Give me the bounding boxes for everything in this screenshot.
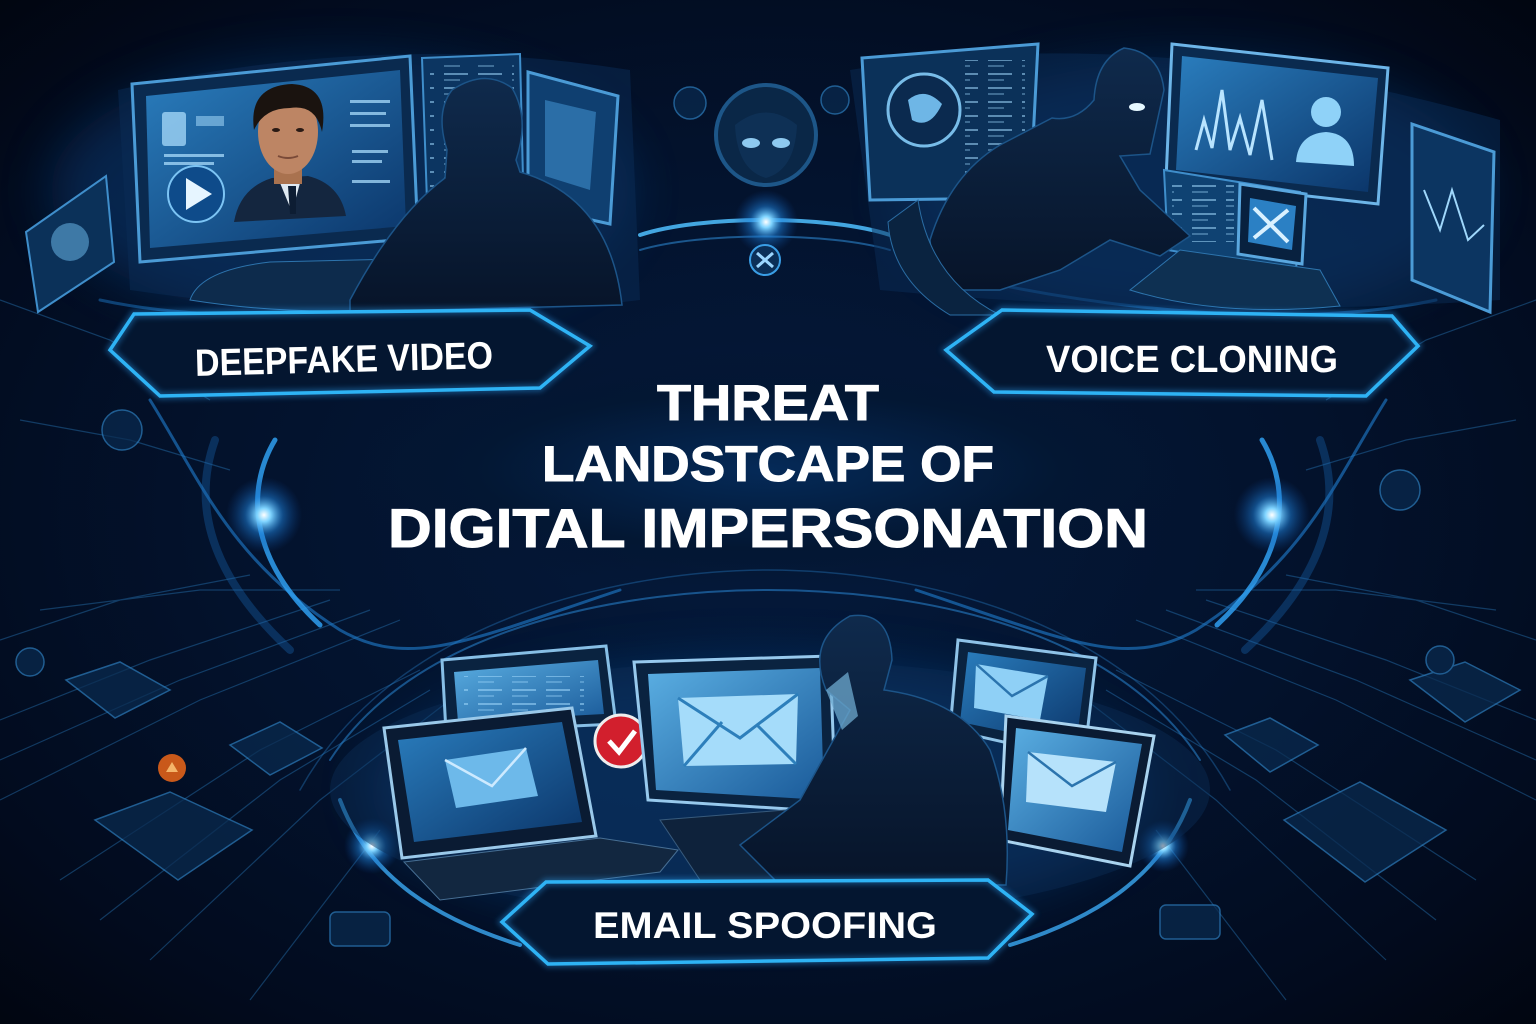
hacker silhouette bbox=[930, 48, 1190, 290]
keyboard desk bbox=[190, 258, 460, 311]
face mask glow bbox=[826, 672, 858, 730]
circuit lines lower left and right bbox=[0, 300, 1536, 1000]
label: email spoofing: EMAIL SPOOFING bbox=[593, 905, 937, 946]
envelope bbox=[445, 748, 538, 808]
portrait of man bbox=[234, 84, 346, 222]
title bbox=[388, 375, 1148, 559]
screen widgets bbox=[162, 100, 390, 183]
panel: email spoofing scene bbox=[330, 615, 1210, 920]
side arcs framing the title bbox=[100, 220, 1436, 945]
panel: voice cloning scene bbox=[850, 44, 1500, 315]
label: email spoofing bbox=[502, 880, 1032, 964]
label: deepfake video: DEEPFAKE VIDEO bbox=[195, 335, 493, 385]
far right screen bbox=[1412, 124, 1494, 312]
orange alert badge bbox=[158, 754, 186, 782]
centre monitor bbox=[634, 656, 836, 812]
mid screen bbox=[1164, 170, 1300, 272]
hacker silhouette bbox=[740, 615, 1007, 885]
label: deepfake video bbox=[110, 310, 590, 396]
right tilted screen bbox=[528, 72, 618, 224]
title: THREAT bbox=[657, 375, 879, 431]
front left laptop bbox=[384, 708, 678, 900]
side screen bbox=[422, 54, 524, 230]
glow points bbox=[226, 190, 1310, 874]
red check badge bbox=[595, 715, 647, 767]
monitor with deepfake face bbox=[132, 56, 418, 262]
glowing eye bbox=[1129, 103, 1145, 111]
label: voice cloning bbox=[946, 310, 1418, 396]
top centre mask emblem bbox=[716, 85, 816, 185]
label: voice cloning: VOICE CLONING bbox=[1046, 339, 1338, 381]
left tilted screen bbox=[26, 176, 114, 312]
caller silhouette bbox=[1296, 97, 1354, 166]
chair bbox=[888, 200, 1000, 315]
front right laptop bbox=[1000, 716, 1154, 866]
chart monitor bbox=[1166, 44, 1388, 204]
rear left laptop bbox=[442, 646, 616, 732]
panel: deepfake video scene bbox=[26, 54, 640, 313]
play button bbox=[168, 166, 224, 222]
keyboard desk bbox=[1130, 250, 1340, 310]
rear right laptop bbox=[950, 640, 1096, 760]
title: LANDSTCAPE OF bbox=[542, 436, 994, 492]
title: DIGITAL IMPERSONATION bbox=[388, 497, 1148, 559]
small emblem below mask bbox=[750, 245, 780, 275]
left screen bbox=[862, 44, 1038, 200]
small DNA monitor bbox=[1238, 184, 1306, 264]
hacker silhouette bbox=[350, 78, 622, 312]
centre laptop base bbox=[660, 808, 850, 880]
